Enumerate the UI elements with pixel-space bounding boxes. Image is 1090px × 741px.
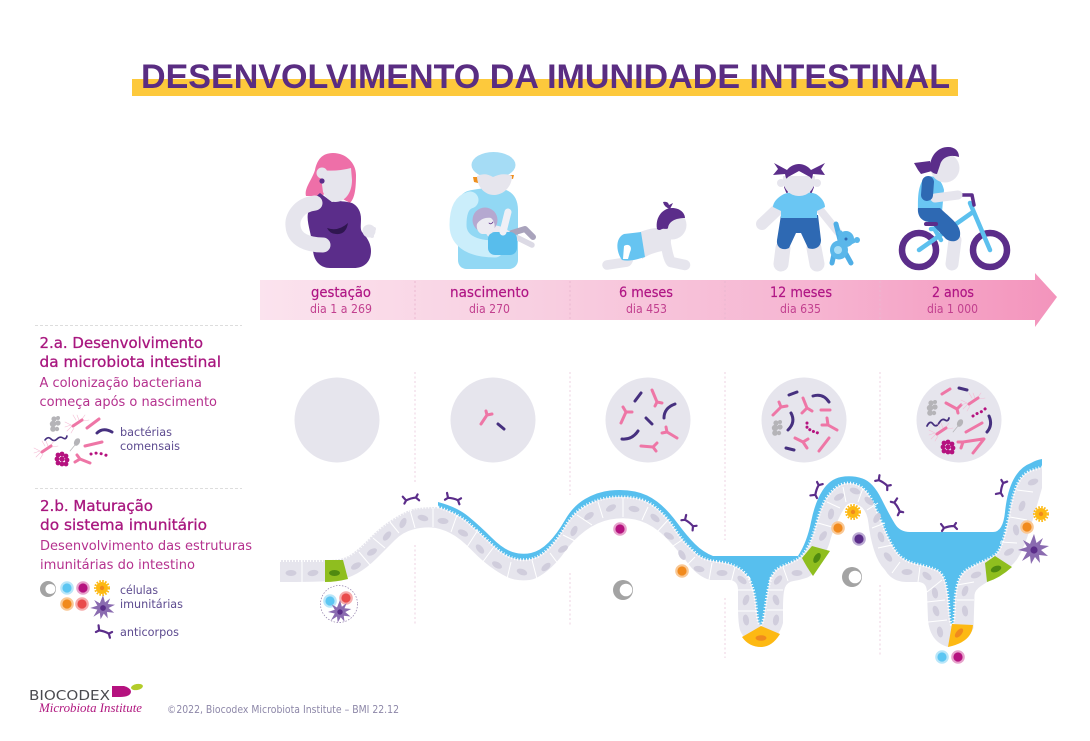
stage label: nascimento: dia 270	[469, 302, 510, 316]
panel: 2.b immune system text: Desenvolvimento das estruturas	[40, 538, 252, 554]
panel: 2.b immune system text	[40, 497, 252, 573]
title: DESENVOLVIMENTO DA IMUNIDADE INTESTINAL	[141, 58, 950, 96]
icon: surgeon holding newborn	[458, 152, 533, 269]
legend: immune cells and antibodies: anticorpos	[120, 625, 179, 639]
panel: 2.a microbiota text: da microbiota intestinal	[40, 353, 221, 371]
stage label: 2 anos	[927, 285, 978, 316]
stage label: 6 meses: 6 meses	[619, 285, 673, 301]
stage label: 12 meses	[770, 285, 832, 316]
6 meses bacteria circle	[606, 378, 690, 462]
panel: 2.a microbiota text	[40, 334, 221, 410]
stage label: nascimento	[450, 285, 529, 316]
immune cells	[320, 505, 1049, 664]
stage label: nascimento: nascimento	[450, 285, 529, 301]
stage label: 6 meses: dia 453	[626, 302, 667, 316]
stage label: gestação: dia 1 a 269	[310, 302, 372, 316]
nascimento bacteria circle	[450, 378, 536, 462]
legend: immune cells and antibodies: células	[120, 583, 158, 597]
logo: Biocodex Microbiota Institute: Microbiota Institute	[38, 701, 142, 715]
icon: child on balance bike	[902, 147, 1007, 267]
panel: 2.b immune system text: imunitárias do intestino	[40, 557, 195, 573]
lumen: blue mucus layer	[438, 459, 1042, 627]
panel: 2.a microbiota text: A colonização bacteriana	[40, 375, 202, 391]
legend: commensal bacteria: bactérias	[120, 425, 172, 439]
stage label: 12 meses: dia 635	[780, 302, 821, 316]
legend: commensal bacteria	[34, 415, 180, 466]
panel: 2.a microbiota text: 2.a. Desenvolvimento	[40, 334, 203, 352]
legend: immune cells and antibodies: imunitárias	[120, 597, 183, 611]
microvilli on uncolonised epithelium	[280, 507, 438, 560]
icon: crawling baby	[607, 202, 686, 265]
green M cells	[325, 546, 1012, 582]
stage label: 2 anos: 2 anos	[932, 285, 974, 301]
antibodies	[403, 475, 1009, 532]
stage label: gestação: gestação	[311, 285, 371, 301]
logo: Biocodex Microbiota Institute	[29, 683, 143, 715]
lymphoid cluster	[320, 586, 358, 622]
yellow Paneth cells	[742, 624, 973, 647]
12 meses bacteria circle	[762, 378, 846, 462]
panel: 2.a microbiota text: começa após o nascimento	[40, 394, 217, 410]
epithelial cell layer	[280, 467, 1042, 647]
legend: commensal bacteria: comensais	[120, 439, 180, 453]
logo: Biocodex Microbiota Institute: BIOCODEX	[29, 689, 110, 704]
panel: 2.b immune system text: do sistema imunitário	[40, 516, 207, 534]
stage label: gestação	[310, 285, 372, 316]
panel: 2.b immune system text: 2.b. Maturação	[40, 497, 153, 515]
intestinal epithelium diagram	[280, 459, 1042, 647]
microvilli along lumen	[438, 467, 1042, 625]
stage label: 2 anos: dia 1 000	[927, 302, 978, 316]
2 anos bacteria circle	[916, 378, 1002, 462]
legend: immune cells and antibodies	[40, 581, 183, 639]
copyright: ©2022, Biocodex Microbiota Institute – BMI 22.12	[167, 704, 399, 716]
gestação: empty circle	[294, 378, 380, 462]
timeline arrow	[260, 273, 1057, 327]
panel: bacteria circles	[294, 378, 1002, 462]
stage label: 6 meses	[619, 285, 673, 316]
icon: toddler with teddy bear	[762, 163, 860, 264]
icon: pregnant woman	[293, 153, 376, 268]
stage label: 12 meses: 12 meses	[770, 285, 832, 301]
